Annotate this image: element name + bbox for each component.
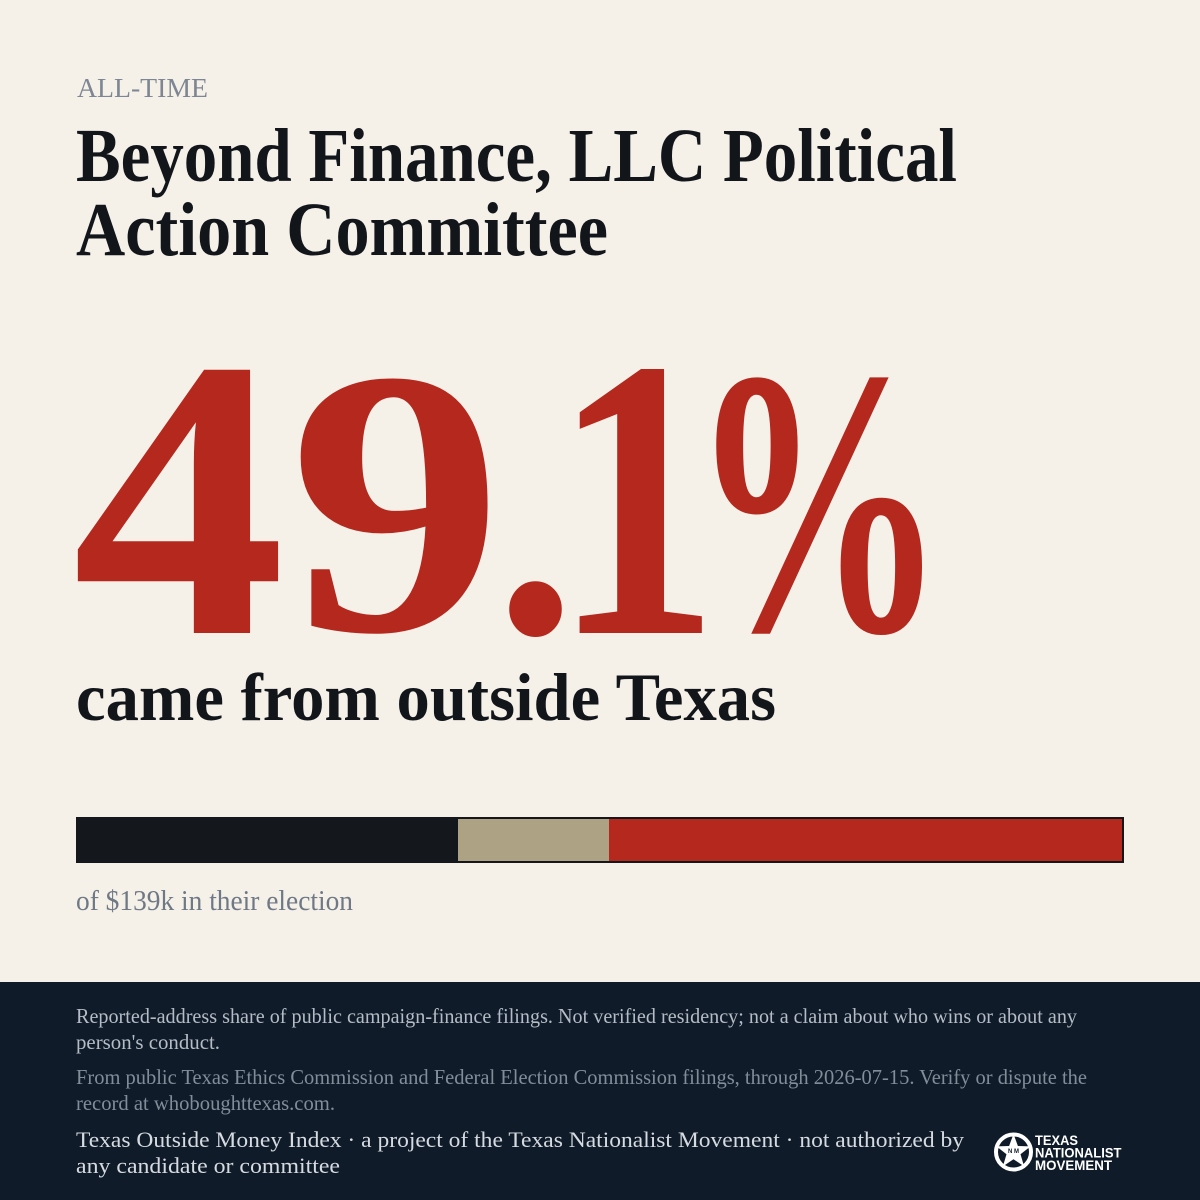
logo wordmark: TEXAS: [1035, 1132, 1078, 1148]
title: Action Committee: [76, 188, 608, 272]
footer project credit: any candidate or committee: [76, 1153, 340, 1178]
logo wordmark: [1035, 1132, 1122, 1173]
footer project credit: Texas Outside Money Index · a project of the Texas Nationalist Movement · not authorized by: [76, 1127, 964, 1152]
footer disclaimer: Reported-address share of public campaign-finance filings. Not verified residency; not a claim about who wins or about any: [76, 1004, 1077, 1028]
eyebrow: all-time: ALL-TIME: [77, 73, 208, 103]
footer project credit: [76, 1127, 964, 1178]
logo wordmark: NATIONALIST: [1035, 1144, 1122, 1160]
bar segment: tan: [458, 819, 609, 861]
big statistic: 49.1%: 1: [553, 277, 719, 720]
footer disclaimer: [76, 1004, 1077, 1054]
big statistic: 49.1%: [72, 277, 946, 720]
logo: Texas Nationalist Movement: [996, 1132, 1122, 1173]
title: [76, 114, 957, 272]
logo wordmark: MOVEMENT: [1035, 1157, 1112, 1173]
big statistic: 49.1%: 4: [72, 277, 286, 720]
footer disclaimer: person's conduct.: [76, 1030, 220, 1054]
big statistic: 49.1%: %: [690, 292, 946, 713]
bar segment: red outside Texas: [609, 819, 1122, 861]
stacked share bar: [76, 817, 1124, 863]
footer band: [0, 982, 1200, 1200]
bar caption: of $139k in their election: [76, 885, 353, 917]
footer source note: record at whoboughttexas.com.: [76, 1091, 335, 1115]
title: Beyond Finance, LLC Political: [76, 114, 957, 198]
footer source note: [76, 1065, 1087, 1115]
subheading: came from outside Texas: [76, 659, 776, 735]
icon: star in ring: N M: [1008, 1149, 1019, 1155]
footer source note: From public Texas Ethics Commission and Federal Election Commission filings, through 2026-07-15. Verify or dispute the: [76, 1065, 1087, 1089]
big statistic: 49.1%: 9: [289, 292, 503, 713]
big statistic: 49.1%: .: [495, 326, 576, 707]
